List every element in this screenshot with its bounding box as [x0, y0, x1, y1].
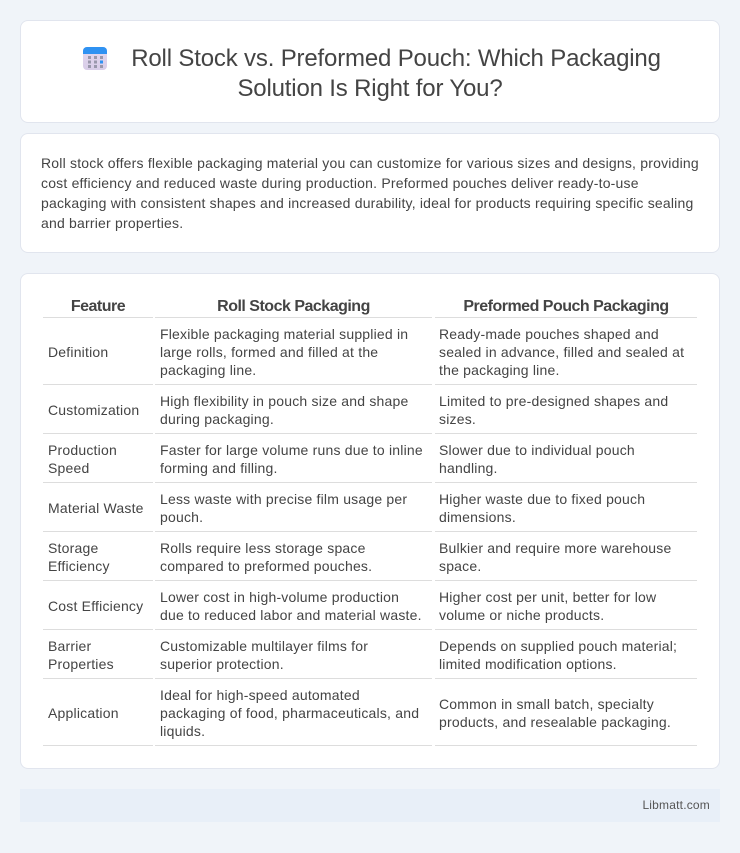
intro text: and barrier properties. [41, 215, 183, 231]
row: Barrier Properties: Barrier [48, 638, 91, 654]
row: Material Waste: Less waste with precise film usage per [160, 491, 407, 507]
row: Barrier Properties: Properties [48, 656, 114, 672]
row: Barrier Properties: superior protection. [160, 656, 284, 672]
row: Application [43, 687, 697, 746]
title: Solution Is Right for You? [237, 75, 503, 102]
table header: Roll Stock Packaging [217, 298, 370, 315]
row: Definition [43, 326, 697, 385]
row: Definition: Definition [48, 344, 108, 360]
row: Customization: Limited to pre-designed shapes and [439, 393, 668, 409]
row: Material Waste: Material Waste [48, 500, 144, 516]
row: Customization [43, 393, 697, 434]
row: Production Speed [43, 442, 697, 483]
row: Application: Ideal for high-speed automated [160, 687, 360, 703]
row: Definition: the packaging line. [439, 362, 560, 378]
row: Storage Efficiency: Rolls require less storage space [160, 540, 366, 556]
row: Barrier Properties: Depends on supplied pouch material; [439, 638, 677, 654]
row: Storage Efficiency: Bulkier and require more warehouse [439, 540, 671, 556]
row: Cost Efficiency: volume or niche products. [439, 607, 604, 623]
row: Customization: Customization [48, 402, 139, 418]
row: Material Waste [43, 491, 697, 532]
panel: comparison table card [20, 273, 720, 769]
row: Definition: Flexible packaging material supplied in [160, 326, 408, 342]
row: Storage Efficiency [43, 540, 697, 581]
row: Definition: large rolls, formed and filled at the [160, 344, 378, 360]
row: Definition: Ready-made pouches shaped and [439, 326, 659, 342]
intro text: Roll stock offers flexible packaging material you can customize for various sizes and designs, providing [41, 155, 699, 171]
row: Production Speed: forming and filling. [160, 460, 278, 476]
row: Application: Common in small batch, specialty [439, 696, 654, 712]
row: Production Speed: Production [48, 442, 117, 458]
row: Definition: packaging line. [160, 362, 256, 378]
row: Cost Efficiency: Cost Efficiency [48, 598, 143, 614]
row: Production Speed: handling. [439, 460, 498, 476]
row: Application: liquids. [160, 723, 205, 739]
intro text: packaging with consistent shapes and increased durability, ideal for products requiring specific sealing [41, 195, 693, 211]
title: Roll Stock vs. Preformed Pouch: Which Packaging [131, 45, 661, 72]
row: Cost Efficiency [43, 589, 697, 630]
row: Application: products, and resealable packaging. [439, 714, 671, 730]
row: Customization: sizes. [439, 411, 476, 427]
row: Barrier Properties: Customizable multilayer films for [160, 638, 368, 654]
row: Production Speed: Speed [48, 460, 89, 476]
row: Barrier Properties [43, 638, 697, 679]
footer credit: Libmatt.com [642, 798, 710, 812]
row: Customization: during packaging. [160, 411, 274, 427]
row: Material Waste: dimensions. [439, 509, 516, 525]
row: Cost Efficiency: Higher cost per unit, better for low [439, 589, 656, 605]
row: Application: Application [48, 705, 119, 721]
row: Definition: sealed in advance, filled and sealed at [439, 344, 684, 360]
intro text [41, 155, 699, 231]
footer bar [20, 789, 720, 822]
intro text: cost efficiency and reduced waste during production. Preformed pouches deliver ready-to-use [41, 175, 639, 191]
row: Storage Efficiency: Storage [48, 540, 98, 556]
row: Storage Efficiency: space. [439, 558, 481, 574]
table header [43, 298, 697, 318]
row: Storage Efficiency: Efficiency [48, 558, 110, 574]
row: Cost Efficiency: due to reduced labor and material waste. [160, 607, 422, 623]
row: Application: packaging of food, pharmaceuticals, and [160, 705, 419, 721]
row: Production Speed: Faster for large volume runs due to inline [160, 442, 423, 458]
row: Customization: High flexibility in pouch size and shape [160, 393, 408, 409]
row: Cost Efficiency: Lower cost in high-volume production [160, 589, 399, 605]
row: Storage Efficiency: compared to preformed pouches. [160, 558, 372, 574]
icon: calendar [83, 47, 107, 70]
panel: intro card [20, 133, 720, 253]
row: Production Speed: Slower due to individual pouch [439, 442, 635, 458]
row: Material Waste: pouch. [160, 509, 203, 525]
table header: Preformed Pouch Packaging [463, 298, 669, 315]
title [131, 45, 661, 102]
row: Barrier Properties: limited modification options. [439, 656, 617, 672]
row: Material Waste: Higher waste due to fixed pouch [439, 491, 645, 507]
table header: Feature [71, 298, 125, 315]
panel: title card [20, 20, 720, 123]
